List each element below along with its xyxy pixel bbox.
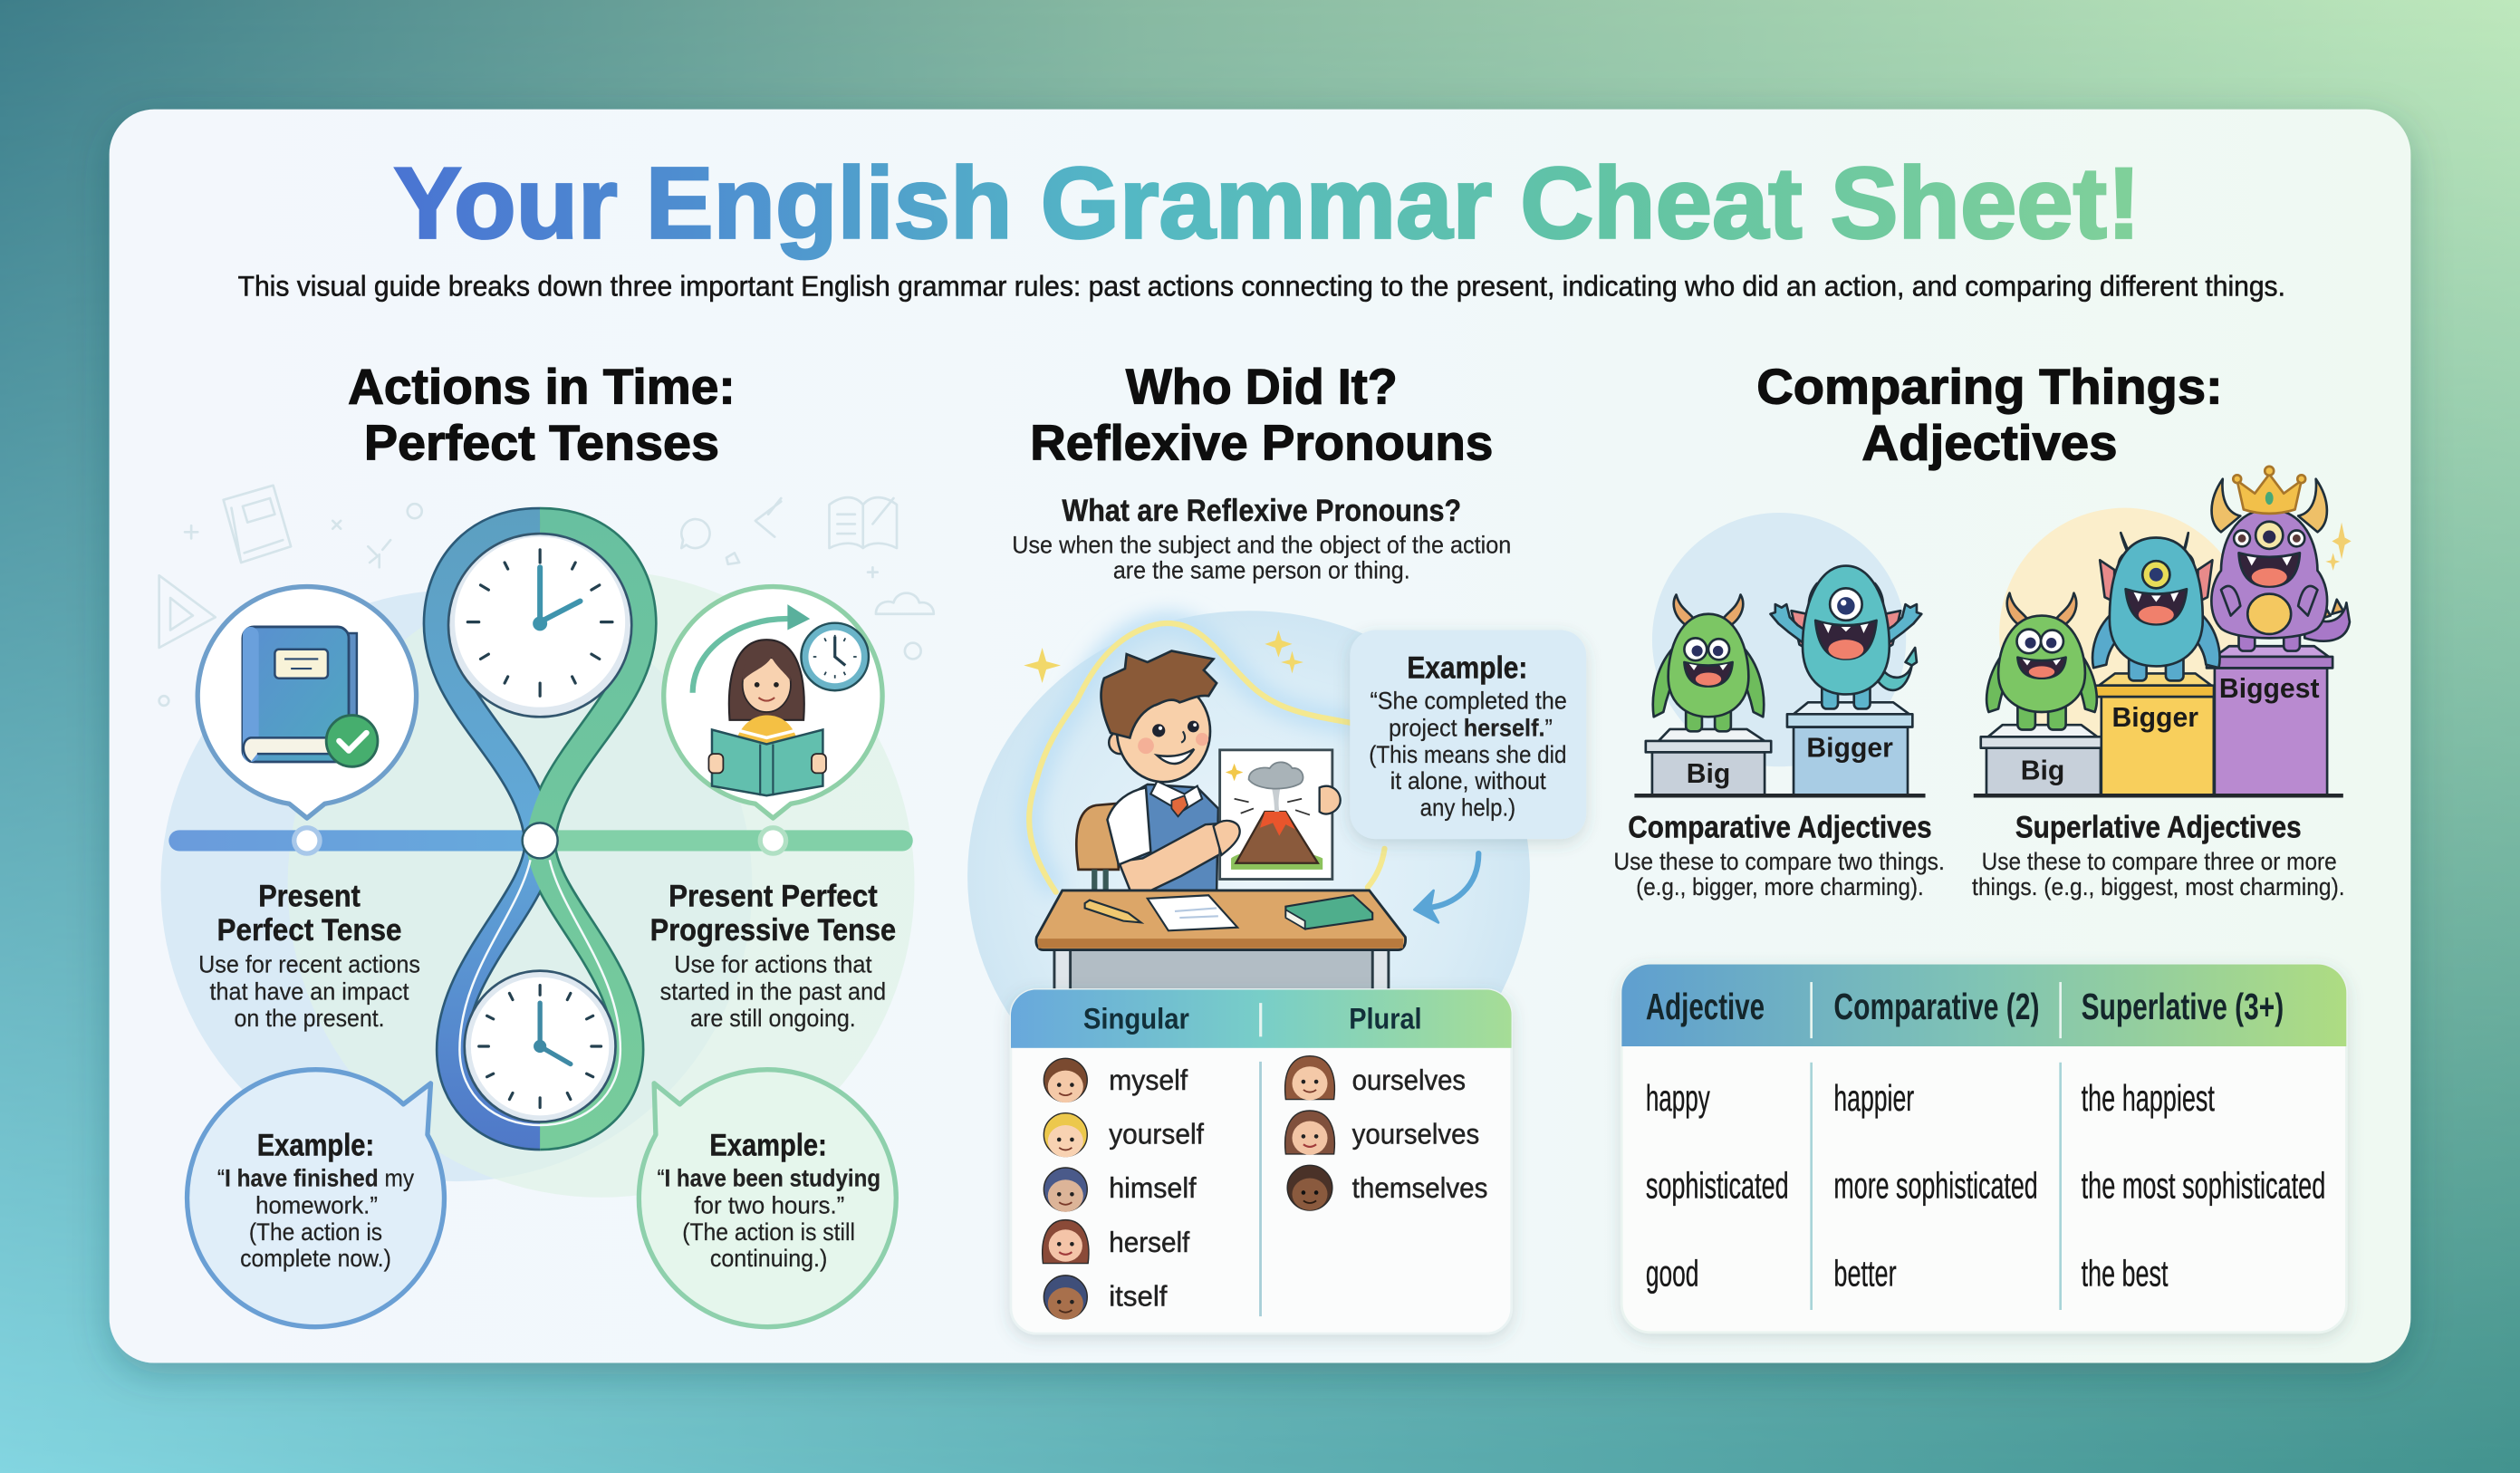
- title: Your English Grammar Cheat Sheet!: [394, 147, 2140, 260]
- text: present perfect tense: on the present.: [235, 1005, 385, 1032]
- icon: girl with book: [708, 640, 826, 795]
- icon: blue book with check: [243, 627, 378, 766]
- table rows: better: [1833, 1252, 1897, 1294]
- table rows: happier: [1833, 1077, 1914, 1119]
- heading: comparing things: Adjectives: [1861, 414, 2118, 470]
- podium: big: [1646, 729, 1771, 795]
- callout: example reflexive: “She completed the: [1370, 687, 1567, 714]
- icon: boy: [1101, 651, 1239, 893]
- bubble: completed book: [197, 587, 417, 818]
- callout: example reflexive: project herself.”: [1389, 715, 1553, 742]
- icon: bottom clock: [465, 971, 616, 1122]
- heading: comparing things: [1756, 358, 2223, 470]
- glow blob behind boy: [967, 611, 1530, 1141]
- monster: teal, comparative: [1770, 566, 1921, 708]
- table rows: good: [1646, 1252, 1698, 1294]
- icon: face himself: [1044, 1168, 1087, 1212]
- heading: who did it: Who Did It?: [1126, 358, 1398, 414]
- text: pronoun rows: yourselves: [1352, 1118, 1479, 1150]
- sparkles: [1024, 631, 1303, 683]
- podium: bigger: Bigger: [1806, 734, 1893, 764]
- icon: face itself: [1044, 1276, 1087, 1320]
- text: pronoun rows: himself: [1109, 1172, 1197, 1204]
- text: what are reflexive pronouns: Use when the subject and the object of the action: [1012, 531, 1511, 558]
- illustration: boy at desk with volcano drawing: [1036, 651, 1406, 990]
- timeline nodes: [294, 823, 786, 858]
- heading: actions in time: Actions in Time:: [348, 358, 736, 414]
- text: comparative adjectives: Use these to compare two things.: [1613, 848, 1945, 875]
- icon: face ourselves: [1285, 1056, 1334, 1100]
- callout: example progressive: Example:: [709, 1129, 827, 1163]
- text: pronoun rows: myself: [1109, 1064, 1188, 1096]
- icon: face themselves: [1287, 1165, 1332, 1210]
- bubble: girl reading: [664, 587, 882, 818]
- icon: top clock: [448, 534, 631, 717]
- callout: example progressive: continuing.): [710, 1245, 827, 1272]
- panel: perfect tenses: [159, 358, 934, 1327]
- icon: desk: [1036, 891, 1406, 990]
- hourglass clock loop: [438, 524, 641, 1135]
- panel: adjectives: [1613, 358, 2352, 1333]
- text: present perfect progressive tense: started in the past and: [660, 978, 886, 1006]
- table rows: happy: [1646, 1077, 1710, 1119]
- text: comparative adjectives: (e.g., bigger, more charming).: [1636, 873, 1924, 900]
- icon: desk pencil, paper and book: [1085, 895, 1372, 930]
- text: comparative adjectives: [1613, 810, 1945, 900]
- monster: teal, superlative: [2092, 533, 2220, 680]
- callout: example present perfect: Example:: [257, 1129, 374, 1163]
- icon: curved arrow: [693, 604, 810, 693]
- callout: example present perfect: “I have finished my: [217, 1164, 415, 1191]
- sparkles near purple monster: [2325, 523, 2352, 571]
- callout: example progressive: for two hours.”: [694, 1192, 844, 1219]
- callout: example reflexive: any help.): [1420, 794, 1515, 821]
- table rows: the best: [2082, 1252, 2169, 1294]
- subtitle: This visual guide breaks down three important English grammar rules: past actions connecting to the present, indicating who did an action, and comparing different things.: [238, 270, 2285, 302]
- text: pronoun rows: [1109, 1064, 1487, 1313]
- arrow: example to boy: [1414, 853, 1478, 922]
- text: present perfect progressive tense: Progressive Tense: [650, 913, 896, 948]
- text: present perfect tense: [198, 880, 420, 1032]
- yellow backdrop circle: [1999, 507, 2237, 736]
- podium: biggest: [2207, 646, 2332, 795]
- blue backdrop circle: [1652, 513, 1906, 766]
- text: pronoun rows: herself: [1109, 1227, 1190, 1258]
- table rows: [1646, 1077, 2325, 1294]
- main card panel: [110, 110, 2410, 1363]
- callout: example progressive: [639, 1070, 896, 1327]
- text: pronoun rows: ourselves: [1352, 1064, 1466, 1096]
- timeline bar: [168, 830, 913, 851]
- ground lines: [1634, 794, 2343, 796]
- text: present perfect tense: Perfect Tense: [217, 913, 402, 948]
- heading: comparing things: Comparing Things:: [1756, 358, 2223, 414]
- icon: crown: [2233, 467, 2305, 514]
- monster: purple with crown: [2211, 467, 2350, 651]
- table header: [1011, 989, 1512, 1048]
- monster: green, comparative: [1653, 594, 1764, 731]
- text: superlative adjectives: [1972, 810, 2345, 900]
- table header: Singular: [1083, 1002, 1189, 1035]
- callout: example present perfect: [188, 1070, 444, 1327]
- text: superlative adjectives: Use these to compare three or more: [1982, 848, 2337, 875]
- icon: face yourself: [1044, 1113, 1087, 1157]
- icon: volcano drawing: [1220, 750, 1332, 880]
- text: pronoun rows: itself: [1109, 1281, 1168, 1313]
- text: present perfect progressive tense: are still ongoing.: [690, 1005, 856, 1032]
- heading: who did it: [1030, 358, 1493, 470]
- yellow swoosh outline: [1029, 623, 1385, 892]
- callout: example present perfect: complete now.): [240, 1245, 391, 1272]
- text: pronoun rows: yourself: [1109, 1118, 1204, 1150]
- heading: actions in time: [348, 358, 736, 470]
- podium: bigger: [1787, 702, 1912, 795]
- text: superlative adjectives: things. (e.g., biggest, most charming).: [1972, 873, 2345, 900]
- text: present perfect tense: Use for recent actions: [198, 950, 420, 977]
- text: what are reflexive pronouns: are the same person or thing.: [1113, 557, 1410, 584]
- table header: Adjective: [1646, 986, 1765, 1027]
- callout: example reflexive: Example:: [1407, 651, 1527, 686]
- table header: Superlative (3+): [2082, 986, 2284, 1027]
- table header: Comparative (2): [1833, 986, 2040, 1027]
- table rows: the happiest: [2082, 1077, 2215, 1119]
- table header: [1621, 965, 2346, 1046]
- faint decorative doodles: [159, 486, 934, 706]
- icon: chair: [1076, 804, 1119, 893]
- table rows: more sophisticated: [1833, 1165, 2038, 1207]
- text: pronoun rows: themselves: [1352, 1172, 1487, 1204]
- text: what are reflexive pronouns: What are Reflexive Pronouns?: [1062, 494, 1461, 528]
- text: comparative adjectives: Comparative Adjectives: [1628, 810, 1932, 844]
- icon: small clock: [801, 623, 869, 690]
- blue glow along swoosh: [1029, 623, 1353, 892]
- monster: green, superlative: [1986, 593, 2097, 730]
- text: present perfect tense: that have an impact: [210, 978, 409, 1006]
- icon: boy's hands: [1214, 786, 1341, 855]
- pale blue circle: [160, 590, 752, 1181]
- podium: biggest: Biggest: [2219, 674, 2320, 704]
- text: present perfect progressive tense: Present Perfect: [668, 880, 878, 914]
- icon: face herself: [1043, 1220, 1089, 1264]
- heading: who did it: Reflexive Pronouns: [1030, 414, 1493, 470]
- table rows: sophisticated: [1646, 1165, 1789, 1207]
- text: what are reflexive pronouns: [1012, 494, 1511, 584]
- panel: reflexive pronouns: [967, 358, 1586, 1333]
- podium: big: [1981, 725, 2102, 795]
- podiums: superlative: [1981, 646, 2332, 795]
- text: superlative adjectives: Superlative Adjectives: [2015, 810, 2302, 844]
- podium: bigger: Bigger: [2111, 703, 2198, 733]
- table header: Plural: [1349, 1002, 1422, 1035]
- pale green circle: [288, 571, 915, 1198]
- icon: face myself: [1044, 1058, 1087, 1102]
- podiums: comparative: [1646, 702, 1912, 795]
- callout: example reflexive: it alone, without: [1390, 767, 1546, 794]
- table: pronouns: [1011, 989, 1512, 1333]
- podium: big: Big: [2021, 756, 2064, 786]
- callout: example present perfect: (The action is: [249, 1218, 382, 1246]
- callout: example reflexive: (This means she did: [1369, 741, 1567, 768]
- icon: face yourselves: [1285, 1111, 1334, 1155]
- text: present perfect progressive tense: Use for actions that: [674, 950, 872, 977]
- callout: example present perfect: homework.”: [255, 1192, 378, 1219]
- table rows: the most sophisticated: [2082, 1165, 2325, 1207]
- podium: bigger: [2094, 673, 2214, 795]
- callout: example progressive: “I have been studying: [657, 1164, 880, 1191]
- text: present perfect progressive tense: [650, 880, 896, 1032]
- table: adjective forms: [1621, 965, 2346, 1333]
- podium: big: Big: [1687, 759, 1730, 789]
- callout: example progressive: (The action is still: [682, 1218, 855, 1246]
- text: present perfect tense: Present: [258, 880, 361, 914]
- heading: actions in time: Perfect Tenses: [364, 414, 719, 470]
- callout: example reflexive: [1350, 631, 1586, 839]
